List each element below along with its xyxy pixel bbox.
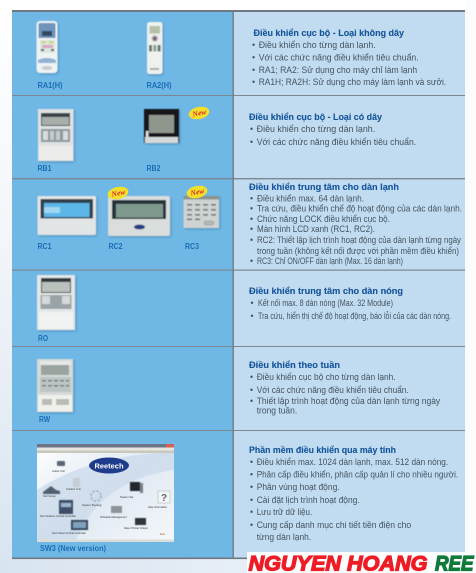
chart: software screenshot SW3: Sort Outdoor Central Controller [40, 514, 76, 518]
text block: computer software control: Phân cấp điều khiển, phân cấp quản lí cho nhiều người. [257, 470, 458, 480]
icon: remote RA2(H) [147, 22, 162, 74]
text block: wired local control: • [250, 137, 253, 147]
label: RC2: RC2 [108, 241, 123, 251]
text block: weekly control: • [250, 396, 253, 406]
icon: Reetech logo: Reetech [94, 462, 124, 470]
text block: computer software control: Phần mềm điều khiển qua máy tính [249, 444, 396, 455]
chart: software screenshot SW3: Sort Indoor Central Controller [52, 531, 86, 535]
text block: indoor central control: • [250, 256, 253, 266]
text block: computer software control: • [250, 495, 253, 505]
text block: indoor central control: Chức năng LOCK điều khiển cục bộ. [257, 214, 390, 224]
text block: wireless local control: RA1; RA2: Sử dụng cho máy chỉ làm lạnh [259, 65, 417, 75]
text block: computer software control: Điều khiển max. 1024 dàn lạnh, max. 512 dàn nóng. [257, 457, 448, 467]
text block: indoor central control: trong tuần (không kết nối được với phần mềm điều khiển) [257, 246, 459, 256]
icon: weekly controller RW [37, 359, 73, 412]
text block: wired local control: Điều khiển cho từng dàn lạnh. [257, 124, 375, 134]
chart: software screenshot SW3: System Set [120, 495, 134, 499]
chart: software screenshot SW3: Sort Group [43, 494, 56, 498]
text block: wireless local control: • [252, 65, 255, 75]
text block: wireless local control: Với các chức năng điều khiển tiêu chuẩn. [259, 52, 419, 62]
icon: New badge RB2 [187, 105, 211, 121]
icon: New badge RC3 [185, 184, 209, 200]
text block: wireless local control: • [252, 77, 255, 87]
text block: wireless local control: Điều khiển cho từng dàn lạnh. [259, 40, 376, 50]
chart: software screenshot SW3: ? [161, 493, 167, 504]
icon: wired controller RB2 [144, 109, 179, 143]
text block: weekly control: Thiết lập trình hoạt động của dàn lạnh từng ngày [257, 396, 441, 406]
icon: New badge RC2: New [110, 187, 127, 199]
text block: indoor central control: • [250, 204, 253, 214]
text block: indoor central control: • [250, 194, 253, 204]
chart: software screenshot SW3: Schedule Management [100, 515, 127, 519]
label: RC3: RC3 [185, 241, 199, 251]
text block: weekly control: Điều khiển cục bộ cho từng dàn lạnh. [257, 372, 396, 382]
text block: outdoor central control: Điều khiển trung tâm cho dàn nóng [249, 285, 403, 296]
text block: wireless local control: • [252, 52, 255, 62]
chart: software screenshot SW3: Indoor Unit [52, 469, 65, 473]
text block: weekly control: • [250, 385, 253, 395]
chart: software screenshot SW3: Outdoor Unit [66, 487, 81, 491]
icon: remote RA1(H) [36, 21, 58, 73]
text block: weekly control: Với các chức năng điều khiển tiêu chuẩn. [257, 385, 409, 395]
text block: computer software control: Cung cấp danh mục chi tiết tiền điện cho [257, 520, 411, 530]
text block: wired local control: • [250, 124, 253, 134]
label: RB1: RB1 [38, 163, 52, 173]
icon: outdoor central controller RO [37, 275, 75, 330]
text block: wireless local control [252, 27, 446, 87]
text block: weekly control [249, 359, 441, 416]
text block: wireless local control: • [252, 40, 255, 50]
text block: indoor central control: RC3: Chỉ ON/OFF dàn lạnh (Max. 16 dàn lạnh) [257, 256, 403, 266]
text block: weekly control: • [250, 372, 253, 382]
text block: wired local control: Với các chức năng điều khiển tiêu chuẩn. [257, 137, 416, 147]
icon: keypad controller RC3 [184, 196, 219, 228]
chart: software screenshot SW3: Data / Printer Output [124, 526, 148, 530]
chart: software screenshot SW3: Help Information [148, 505, 168, 509]
label: RW: RW [39, 414, 51, 424]
icon: wired controller RB1 [38, 109, 74, 161]
label: RA2(H): RA2(H) [146, 80, 172, 90]
text block: computer software control [249, 444, 458, 542]
text block: outdoor central control: Kết nối max. 8 dàn nóng (Max. 32 Module) [258, 298, 393, 308]
text block: computer software control: • [250, 457, 253, 467]
text block: indoor central control: • [250, 214, 253, 224]
panel: description column [234, 11, 465, 558]
text block: computer software control: Phân vùng hoạt động. [257, 482, 340, 492]
text block: computer software control: • [250, 520, 253, 530]
text block: wired local control: Điều khiển cục bộ - Loại có dây [249, 111, 383, 122]
text block: indoor central control: Điều khiển trung tâm cho dàn lạnh [249, 181, 399, 192]
text block: outdoor central control: • [250, 298, 254, 308]
text block: computer software control: • [250, 482, 253, 492]
label: RO: RO [38, 333, 48, 343]
text block: weekly control: trong tuần. [257, 406, 297, 416]
chart: software screenshot SW3: System Topology [82, 503, 102, 507]
text block: computer software control: • [250, 470, 253, 480]
text block: outdoor central control: • [250, 311, 254, 321]
label: SW3: SW3 (New version) [40, 543, 106, 553]
label: RB2: RB2 [146, 163, 161, 173]
text block: indoor central control: • [250, 224, 253, 234]
text block: indoor central control [249, 181, 462, 266]
icon: central controller RC1 [38, 196, 96, 235]
icon: New badge RC3: New [189, 186, 206, 198]
text block: indoor central control: Màn hình LCD xanh (RC1, RC2). [257, 224, 375, 234]
text block: wireless local control: Điều khiển cục bộ - Loại không dây [254, 27, 405, 38]
text block: indoor central control: Điều khiển max. 64 dàn lạnh. [257, 194, 364, 204]
text block: computer software control: Cài đặt lịch trình hoạt động. [257, 495, 360, 505]
text block: wired local control [249, 111, 416, 147]
text block: computer software control: từng dàn lạnh. [257, 532, 311, 542]
icon: New badge RB2: New [191, 107, 208, 119]
text block: indoor central control: • [250, 235, 253, 245]
text block: outdoor central control [249, 285, 451, 321]
label: RC1: RC1 [38, 241, 52, 251]
text block: indoor central control: Tra cứu, điều khiển chế độ hoạt động của các dàn lạnh. [257, 204, 462, 214]
label: RA1(H): RA1(H) [38, 80, 63, 90]
icon: central controller RC2 [108, 196, 170, 236]
panel: device column [12, 11, 233, 558]
text block: computer software control: • [250, 507, 253, 517]
chart: software screenshot SW3 [37, 444, 174, 542]
text block: weekly control: Điều khiển theo tuần [249, 359, 340, 370]
text block: wireless local control: RA1H; RA2H: Sử dụng cho máy làm lạnh và sưởi. [259, 77, 446, 87]
chart: software screenshot SW3: Exit [160, 532, 165, 536]
text block: computer software control: Lưu trữ dữ liệu. [257, 507, 312, 517]
icon: New badge RC2 [106, 185, 130, 201]
